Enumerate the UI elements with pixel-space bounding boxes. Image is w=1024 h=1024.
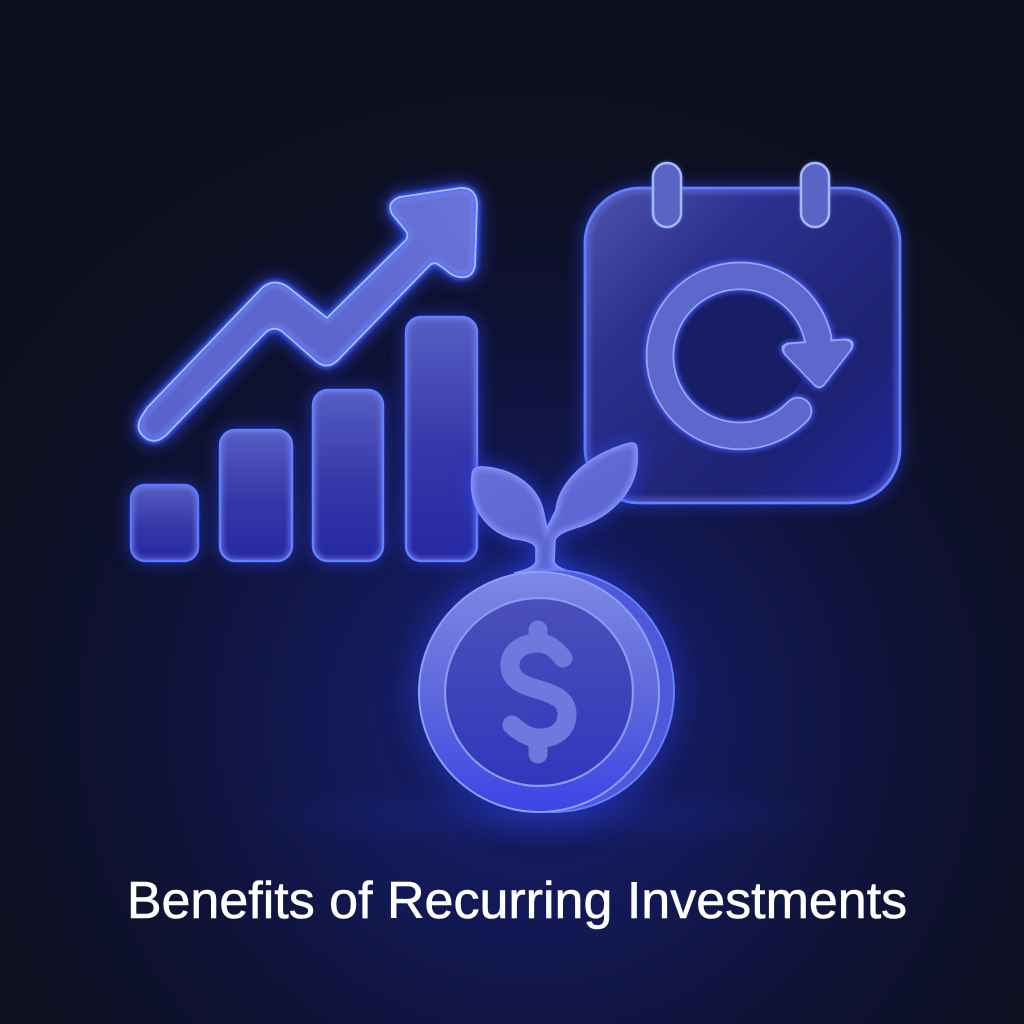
icon: rising arrow <box>138 188 477 441</box>
bar 1 <box>131 485 198 561</box>
dollar sign <box>510 630 567 754</box>
coin inner ring <box>445 598 633 786</box>
bar 4 <box>406 317 477 561</box>
bar 3 <box>313 390 383 561</box>
floor glow <box>240 780 840 850</box>
coin face <box>419 572 659 812</box>
coin back edge <box>432 570 674 812</box>
title: Benefits of Recurring Investments <box>127 872 907 930</box>
icon: coin with sprout <box>419 443 674 816</box>
sprout <box>472 443 637 573</box>
bar 2 <box>220 430 292 561</box>
calendar ring right <box>801 163 829 227</box>
calendar ring left <box>653 163 681 227</box>
recurring arrow <box>660 276 853 436</box>
icon: calendar with recurring arrow <box>585 163 900 503</box>
icon: bar chart <box>131 317 477 561</box>
